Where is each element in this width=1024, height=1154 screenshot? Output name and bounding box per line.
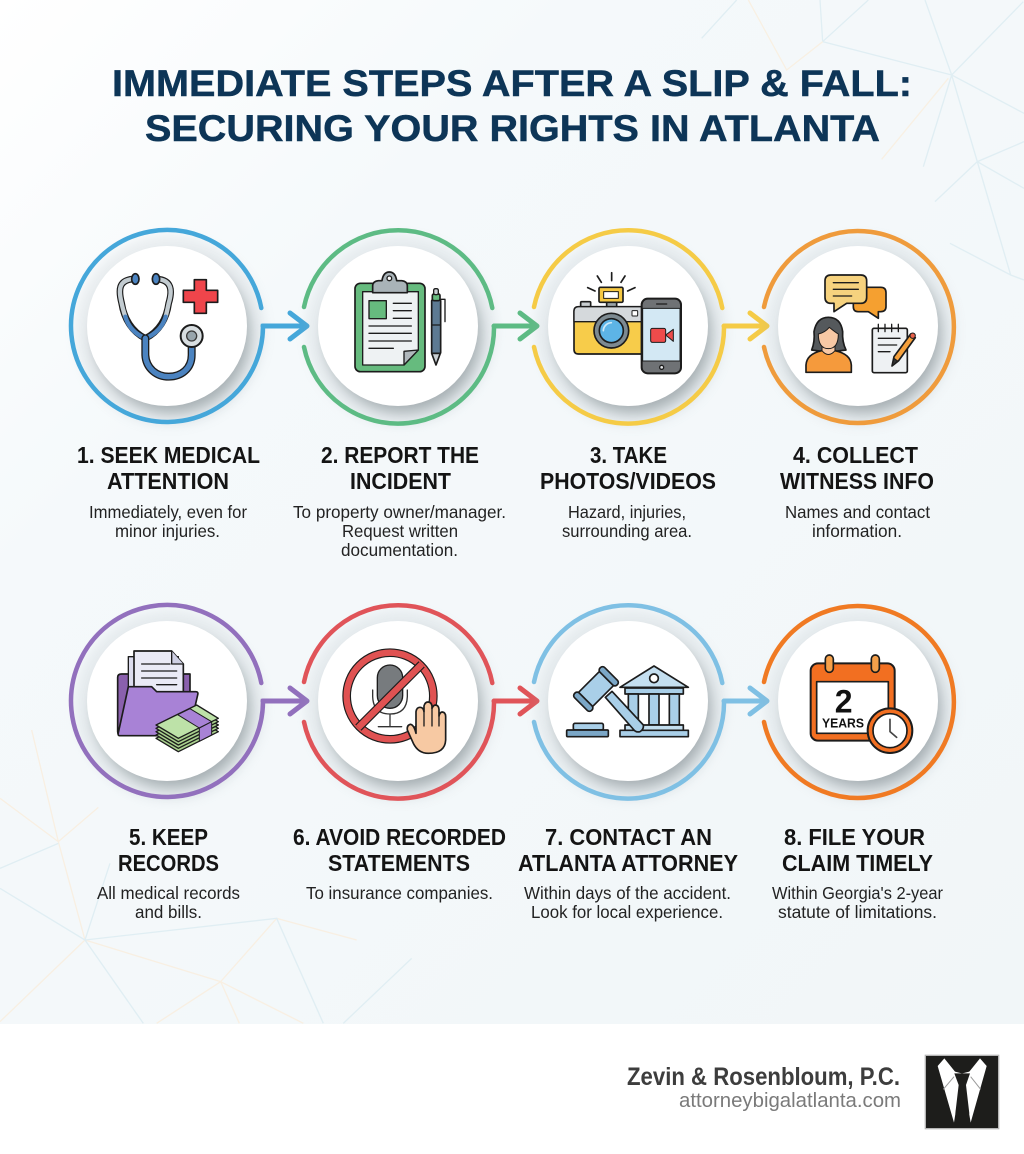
title: SECURING YOUR RIGHTS IN ATLANTA bbox=[145, 107, 880, 149]
step 2 text: documentation. bbox=[341, 540, 458, 560]
step 6 text bbox=[293, 824, 506, 903]
step 4 text bbox=[780, 442, 934, 541]
step 1 text bbox=[77, 442, 260, 541]
step 1 ring and arrow bbox=[71, 230, 307, 427]
step 2 text: INCIDENT bbox=[350, 468, 451, 494]
step 5 text bbox=[97, 824, 240, 922]
step 3 text: Hazard, injuries, bbox=[568, 502, 686, 522]
footer band bbox=[0, 1024, 1024, 1154]
icon: calendar with clock: 2 bbox=[835, 683, 853, 719]
icon: gavel and courthouse bbox=[567, 665, 688, 737]
step 2 text: To property owner/manager. bbox=[293, 502, 506, 522]
icon: stethoscope and red cross bbox=[120, 274, 218, 377]
step 5 text: All medical records bbox=[97, 883, 240, 903]
step 1 text: minor injuries. bbox=[115, 521, 220, 541]
step 7 text: Look for local experience. bbox=[531, 902, 723, 922]
step 3 ring and arrow bbox=[534, 230, 767, 427]
icon: folder and cash bbox=[118, 651, 218, 752]
step 4 text: 4. COLLECT bbox=[793, 442, 918, 468]
logo: suit and tie bbox=[925, 1055, 999, 1129]
step 1 text: 1. SEEK MEDICAL bbox=[77, 442, 260, 468]
footer firm name and website: Zevin & Rosenbloum, P.C. bbox=[627, 1063, 900, 1091]
step 8 ring bbox=[764, 606, 957, 802]
step 7 text: ATLANTA ATTORNEY bbox=[518, 850, 738, 876]
step 3 text bbox=[540, 442, 716, 541]
step 8 text: 8. FILE YOUR bbox=[784, 824, 925, 850]
step 8 text: Within Georgia's 2-year bbox=[772, 883, 943, 903]
step 3 text: PHOTOS/VIDEOS bbox=[540, 468, 716, 494]
step 5 text: RECORDS bbox=[118, 850, 219, 876]
icon: calendar with clock: YEARS bbox=[822, 716, 864, 730]
step 8 text: statute of limitations. bbox=[778, 902, 937, 922]
step 6 text: 6. AVOID RECORDED bbox=[293, 824, 506, 850]
icon: clipboard and pen bbox=[355, 272, 445, 372]
step 6 text: To insurance companies. bbox=[306, 883, 493, 903]
step 2 text: 2. REPORT THE bbox=[321, 442, 479, 468]
step 8 text: CLAIM TIMELY bbox=[782, 850, 933, 876]
step 3 text: 3. TAKE bbox=[590, 442, 667, 468]
step 4 ring bbox=[764, 231, 957, 427]
step 7 text: 7. CONTACT AN bbox=[545, 824, 712, 850]
icon: calendar with clock bbox=[811, 655, 912, 753]
title: IMMEDIATE STEPS AFTER A SLIP & FALL: bbox=[112, 62, 912, 104]
step 8 text bbox=[772, 824, 943, 922]
step 2 text: Request written bbox=[342, 521, 458, 541]
step 1 text: ATTENTION bbox=[107, 468, 229, 494]
icon: witness, speech bubbles and notepad bbox=[806, 275, 915, 373]
step 7 text bbox=[518, 824, 738, 922]
icon: camera and phone bbox=[574, 273, 681, 373]
footer firm name and website: attorneybigalatlanta.com bbox=[679, 1089, 901, 1112]
step 1 text: Immediately, even for bbox=[89, 502, 247, 522]
step 2 text bbox=[293, 442, 506, 560]
icon: crossed-out microphone and stop hand bbox=[347, 653, 446, 753]
step 5 text: and bills. bbox=[135, 902, 202, 922]
step 2 ring and arrow bbox=[304, 230, 537, 427]
step 6 text: STATEMENTS bbox=[328, 850, 470, 876]
step 4 text: WITNESS INFO bbox=[780, 468, 934, 494]
step 7 text: Within days of the accident. bbox=[524, 883, 731, 903]
footer firm name and website bbox=[627, 1063, 901, 1112]
step 4 text: information. bbox=[812, 521, 902, 541]
step 3 text: surrounding area. bbox=[562, 521, 692, 541]
title bbox=[112, 62, 912, 149]
step 5 ring and arrow bbox=[71, 605, 307, 802]
step 6 ring and arrow bbox=[304, 605, 537, 802]
step 7 ring and arrow bbox=[534, 605, 767, 802]
step 4 text: Names and contact bbox=[785, 502, 930, 522]
step 5 text: 5. KEEP bbox=[129, 824, 208, 850]
